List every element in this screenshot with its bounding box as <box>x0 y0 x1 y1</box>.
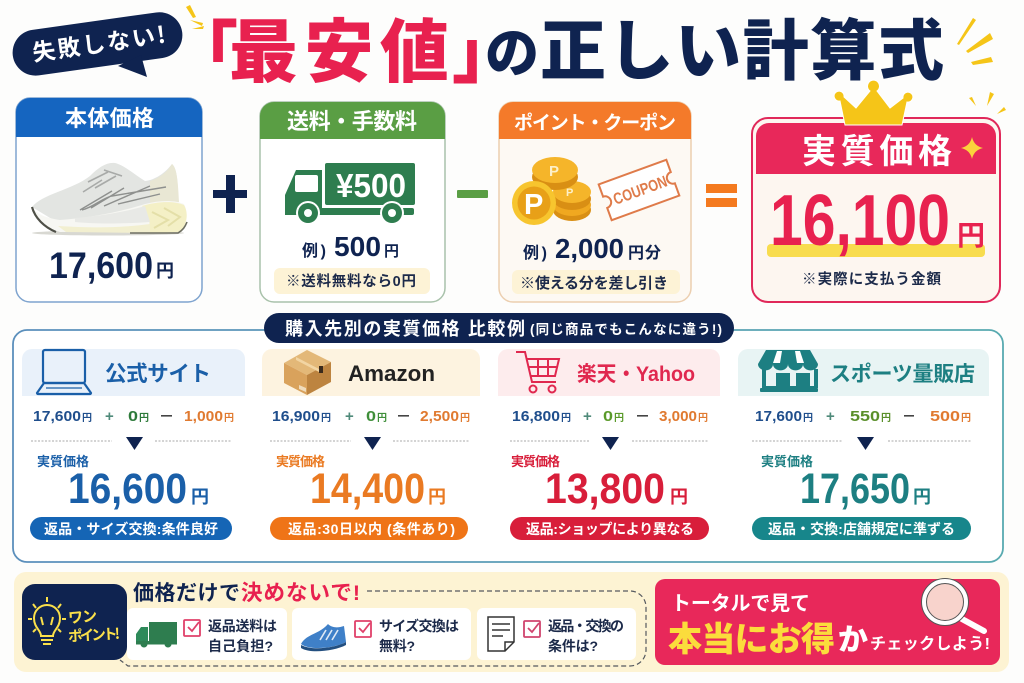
price: 17,600円: 円 <box>156 261 174 281</box>
result: 13,800円: 実質価格 <box>511 454 560 469</box>
heading: 価格だけで決めないで!: 決めないで! <box>241 581 360 605</box>
title: の <box>485 9 539 88</box>
icon: title sparkle right <box>957 18 993 65</box>
price: 16,100円: 円 <box>957 220 985 251</box>
panel heading: 本体価格: 本体価格 <box>65 106 154 131</box>
card: 楽天・Yahoo <box>498 349 720 551</box>
heading: 価格だけで決めないで!: 価格だけで <box>133 582 240 605</box>
midsole <box>32 201 187 232</box>
formula row: 円 <box>803 412 813 424</box>
formula row: 円 <box>82 412 92 424</box>
formula row: 16,800 <box>512 408 560 425</box>
badge: ワンポイント!: ワン <box>67 605 98 628</box>
formula row: 3,000 <box>659 408 697 425</box>
card heading: 公式サイト: 公式サイト <box>105 362 211 386</box>
result: 17,650円: 円 <box>913 487 931 507</box>
heading pill: 購入先別の実質価格 比較例: (同じ商品でもこんなに違う!) <box>530 321 722 337</box>
formula row: 円 <box>460 412 470 424</box>
value: 例)500円 <box>302 231 399 262</box>
formula row: 円 <box>321 412 331 424</box>
icon: cardboard box <box>284 350 331 395</box>
price: 17,600円: 17,600 <box>49 245 153 286</box>
result: 14,400円: 実質価格 <box>276 454 325 469</box>
check item: サイズ交換: 無料? <box>379 638 415 654</box>
white checklist card 3 <box>477 608 636 660</box>
formula row: 17,600 <box>755 408 802 425</box>
icon: truck ¥500: ¥500 <box>336 167 406 204</box>
value: 例)2,000円分: 円分 <box>628 244 661 262</box>
callout: トータルで見て本当にお得か: トータルで見て <box>671 592 810 615</box>
title: 」 <box>452 0 520 97</box>
white checklist card 2 <box>292 608 471 660</box>
check item: 返品送料 <box>136 618 277 654</box>
formula row: + <box>583 408 592 425</box>
formula row <box>512 408 708 425</box>
panel: 本体価格 <box>16 98 202 302</box>
operator: minus <box>457 190 488 198</box>
formula row: 17,600 <box>33 408 81 425</box>
pill: return policy <box>510 517 709 540</box>
note: 使える分を差し引き <box>512 270 680 294</box>
check item: 返品・交換の条件: 条件は? <box>548 638 598 654</box>
callout: トータルで見て本当にお得か: 本当にお得 <box>668 612 835 661</box>
icon: title sparkle left <box>186 5 204 29</box>
formula row: 円 <box>561 412 571 424</box>
white checklist card 1 <box>127 608 287 660</box>
result: 13,800円: 円 <box>670 487 688 507</box>
formula row: 円 <box>224 412 234 424</box>
speech bubble: 失敗しない!: 失敗しない! <box>30 16 167 68</box>
result: 13,800円: 13,800 <box>545 465 665 513</box>
result: 17,650円 <box>761 454 931 513</box>
operator: plus <box>213 175 247 213</box>
icon: crown sparkle <box>969 92 1006 114</box>
icon: coupon <box>599 160 679 220</box>
pill: return policy: 返品・サイズ交換:条件良好 <box>44 521 218 537</box>
heading pill: 購入先別の実質価格 比較例: 購入先別の実質価格 比較例 <box>285 319 525 339</box>
icon: running shoe <box>32 163 187 236</box>
formula row: 0 <box>366 408 376 425</box>
panel: ポイント・クーポン <box>499 102 691 302</box>
formula row: 0 <box>128 408 138 425</box>
formula row: 円 <box>614 412 624 424</box>
card: スポーツ量販店 <box>738 349 989 551</box>
icon: light bulb <box>28 597 66 644</box>
icon: point coins: P <box>566 187 573 199</box>
check item: サイズ交換: サイズ交換は <box>379 618 459 634</box>
check item: 返品・交換の条件: 返品・交換の <box>548 618 624 634</box>
price: 16,100円: 16,100 <box>770 181 950 261</box>
speech bubble: 失敗しない! <box>10 9 185 79</box>
panel: 実質価格 result <box>752 118 1000 302</box>
card heading: スポーツ量販店: スポーツ量販店 <box>830 363 975 386</box>
result: 16,600円: 16,600 <box>68 465 187 513</box>
arrow: down triangle <box>602 437 619 450</box>
icon: point coins: P <box>549 163 559 180</box>
result: 16,600円: 円 <box>191 487 209 507</box>
heading pill: 購入先別の実質価格 比較例 <box>264 313 734 343</box>
heading: 価格だけで決めないで! <box>133 581 360 605</box>
formula row: + <box>345 408 354 425</box>
stripes <box>80 186 166 210</box>
callout: トータルで見て本当にお得か: か <box>838 615 868 659</box>
formula row: 1,000 <box>184 408 223 425</box>
check item: 返品・交換の条件 <box>488 617 624 654</box>
check item: サイズ交換 <box>301 618 459 654</box>
card heading: Amazon: Amazon <box>348 361 435 386</box>
formula row: + <box>105 408 114 425</box>
note: 使える分を差し引き: ※使える分を差し引き <box>520 274 668 292</box>
value: 例)2,000円分 <box>523 233 661 264</box>
icon: document <box>488 617 514 651</box>
pill: return policy: 返品:ショップにより異なる <box>526 521 694 537</box>
outsole line <box>32 207 56 232</box>
value: 例)500円: 500 <box>334 231 381 262</box>
pill: return policy <box>270 517 468 540</box>
card: Amazon <box>262 349 480 551</box>
result: 17,650円: 17,650 <box>800 465 910 513</box>
operator: equals <box>706 184 737 207</box>
card heading: 楽天・Yahoo: 楽天・Yahoo <box>577 363 695 386</box>
icon: checkbox <box>355 621 371 637</box>
title: 正しい計算式 <box>540 0 944 94</box>
result: 16,600円: 実質価格 <box>37 454 89 469</box>
value: 例)2,000円分: 2,000 <box>555 233 624 264</box>
title: 「 <box>170 0 238 97</box>
pill: return policy: 返品・交換:店舗規定に準ずる <box>768 521 955 537</box>
panel: comparison frame <box>13 313 1003 562</box>
formula row: 円 <box>139 412 149 424</box>
formula row: 500 <box>930 408 960 425</box>
formula row: 550 <box>850 408 880 425</box>
result: 16,600円 <box>37 454 209 513</box>
panel: 送料・手数料 <box>260 102 445 302</box>
icon: checkbox <box>524 621 540 637</box>
arrow: down triangle <box>126 437 143 450</box>
formula row <box>755 408 971 425</box>
formula row: 16,900 <box>272 408 320 425</box>
result: 14,400円: 14,400 <box>310 465 425 513</box>
formula row: + <box>826 408 835 425</box>
result: 13,800円 <box>511 454 688 513</box>
value: 例)500円: 例) <box>302 242 326 260</box>
icon: sparkle star <box>961 137 983 159</box>
note: 実際に支払う金額: ※実際に支払う金額 <box>802 270 942 288</box>
icon: laptop <box>37 350 91 394</box>
formula row: 2,500 <box>420 408 459 425</box>
formula row: 円 <box>881 412 891 424</box>
check item: 返品送料: 自己負担? <box>208 638 273 654</box>
icon: shopping cart <box>516 352 559 392</box>
panel heading: ポイント・クーポン: ポイント・クーポン <box>514 111 676 134</box>
icon: truck ¥500 <box>285 163 415 225</box>
formula row <box>272 408 470 425</box>
formula row: 円 <box>698 412 708 424</box>
underline highlight <box>767 244 985 257</box>
value: 例)2,000円分: 例) <box>523 244 547 262</box>
note: 送料無料なら0円 <box>274 268 430 294</box>
arrow: down triangle <box>364 437 381 450</box>
arrow: down triangle <box>857 437 874 450</box>
icon: coupon: COUPON <box>611 174 670 209</box>
check item: 返品送料: 返品送料は <box>208 618 277 634</box>
card: 公式サイト <box>22 349 245 551</box>
badge: ワンポイント! <box>22 584 127 660</box>
note: 送料無料なら0円: ※送料無料なら0円 <box>286 273 416 290</box>
icon: blue sneaker <box>301 624 346 651</box>
panel heading: 送料・手数料: 送料・手数料 <box>287 109 417 134</box>
icon: magnifying glass <box>922 578 984 631</box>
pill: return policy: 返品:30日以内 (条件あり) <box>288 521 455 537</box>
icon: point coins: P <box>524 189 543 221</box>
formula row: 0 <box>603 408 613 425</box>
formula row: 円 <box>377 412 387 424</box>
icon: small truck <box>136 622 177 648</box>
icon: point coins <box>512 157 591 225</box>
result: 17,650円: 実質価格 <box>761 454 813 469</box>
heading: 実質価格: 実質価格 <box>802 133 952 171</box>
callout: トータルで見て本当にお得か <box>655 578 1000 665</box>
title <box>170 0 944 97</box>
badge: ワンポイント!: ポイント! <box>68 623 121 646</box>
pill: return policy <box>752 517 971 540</box>
value: 例)500円: 円 <box>384 243 399 260</box>
formula row: 円 <box>961 412 971 424</box>
icon: crown <box>834 80 913 125</box>
icon: checkbox <box>184 620 200 636</box>
result: 14,400円 <box>276 454 446 513</box>
formula row <box>33 408 234 425</box>
pill: return policy <box>30 517 232 540</box>
icon: storefront <box>758 350 818 392</box>
panel: one point band <box>14 572 1009 672</box>
upper <box>32 163 178 224</box>
callout: トータルで見て本当にお得か: チェックしよう! <box>870 635 990 653</box>
result: 14,400円: 円 <box>428 487 446 507</box>
